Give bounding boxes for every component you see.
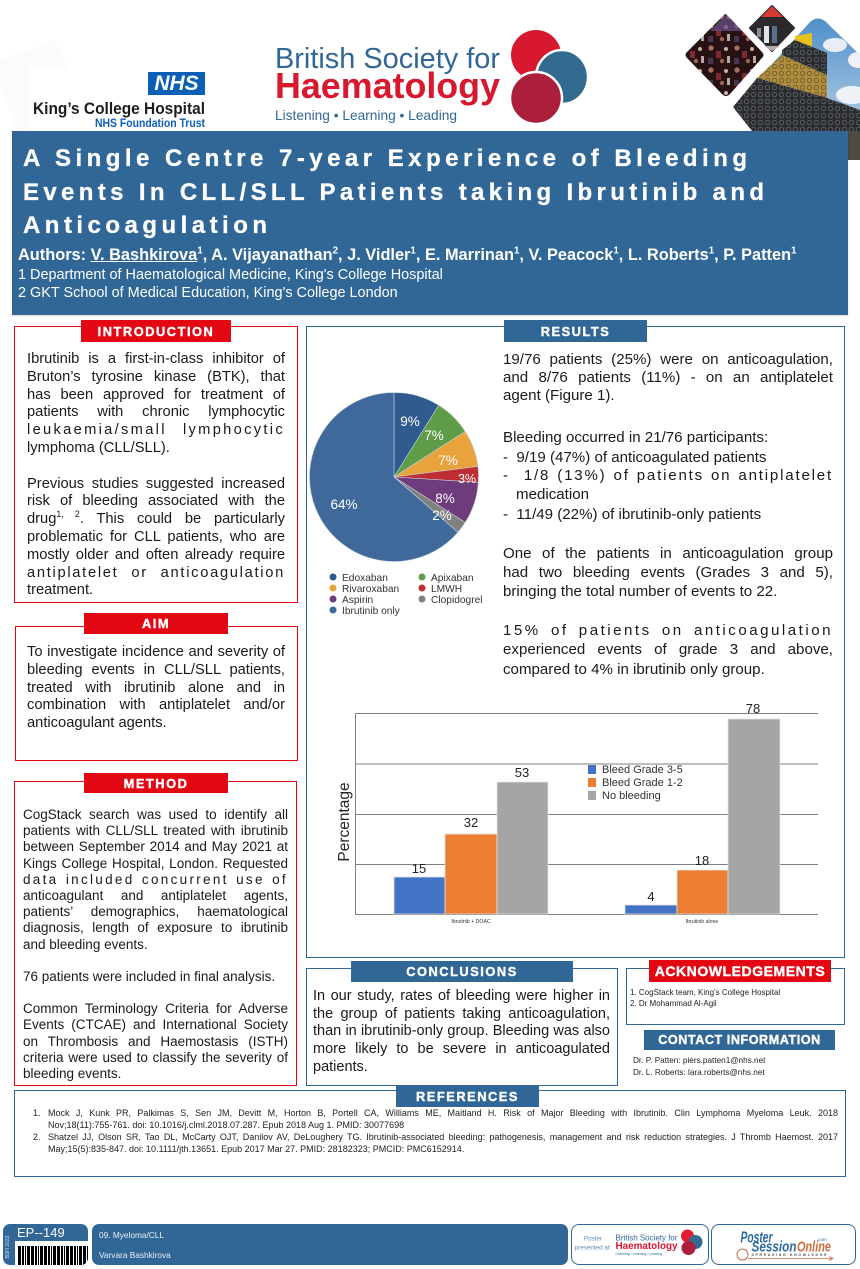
text: results: bringing the total number of events to 22.	[503, 583, 777, 600]
text: aim: bleeding events in CLL/SLL patients,	[27, 662, 285, 678]
logo: British Society for Haematology	[275, 30, 587, 123]
text: introduction: treatment.	[27, 582, 93, 598]
footer: BSH logo box	[571, 1224, 709, 1265]
chart legend: No bleeding	[602, 790, 661, 802]
title: A Single Centre 7-year Experience of Bleeding	[23, 145, 747, 172]
heading: results: RESULTS	[541, 324, 610, 339]
pie legend: Apixaban	[431, 573, 473, 584]
pie legend: Clopidogrel	[431, 595, 483, 606]
slice: Apixaban 7%	[394, 405, 465, 477]
text: introduction: Previous studies suggested increased	[27, 476, 285, 492]
chart legend: Bleed Grade 3-5	[602, 764, 683, 776]
heading: introduction: INTRODUCTION	[98, 324, 214, 339]
heading: acknowledgements: ACKNOWLEDGEMENTS	[655, 963, 825, 979]
heading: references: REFERENCES	[416, 1089, 519, 1104]
category labels: Ibrutinib alone	[686, 919, 718, 925]
text: conclusions: patients.	[313, 1059, 368, 1075]
footer: Poster Session Online logo box: .com	[817, 1237, 827, 1242]
footer: Poster Session Online logo box: Online	[797, 1238, 831, 1256]
bar value labels: 78	[746, 701, 760, 716]
panel: introduction	[14, 326, 298, 603]
text: references: 2.	[33, 1132, 41, 1142]
text: results: - 1/8 (13%) of patients on antiplatelet	[503, 467, 833, 484]
affiliations: 2 GKT School of Medical Education, King's College London	[18, 285, 398, 301]
text: method	[23, 807, 288, 1081]
pie value labels: 7%	[438, 453, 458, 468]
pie legend: Edoxaban	[342, 573, 388, 584]
text: introduction: antiplatelet or anticoagulation	[27, 565, 285, 581]
poster number: EP--149	[17, 1225, 65, 1240]
heading: conclusions: CONCLUSIONS	[406, 964, 518, 979]
hospital name: King’s College Hospital	[33, 100, 205, 118]
logo: King's College Hospital NHS	[29, 68, 208, 132]
heading: contact information: CONTACT INFORMATION	[658, 1033, 821, 1047]
text: introduction: Bruton’s tyrosine kinase (BTK), that	[27, 369, 285, 385]
pie legend: Aspirin	[342, 595, 373, 606]
bars: Ibrutinib alone	[625, 719, 780, 914]
pie value labels: 3%	[458, 472, 476, 486]
footer: BSH logo box: Listening • Learning • Leading	[616, 1252, 662, 1256]
vertical code: BSH 2023	[5, 1236, 11, 1258]
text: aim: treated with ibrutinib alone and in	[27, 680, 285, 696]
heading: results	[504, 320, 647, 342]
text: method: data included concurrent use of	[23, 872, 288, 887]
heading: method	[84, 773, 228, 793]
text: method: Kings College Hospital, London. Requested	[23, 856, 288, 871]
hospital name	[33, 100, 205, 130]
slice: Ibrutinib only 64%	[310, 392, 458, 562]
text: aim: To investigate incidence and severity of	[27, 644, 285, 660]
hospital name: NHS Foundation Trust	[95, 118, 205, 130]
heading: references	[396, 1085, 539, 1107]
text: results: One of the patients in anticoagulation group	[503, 545, 833, 562]
affiliations	[18, 267, 443, 301]
text: results: 19/76 patients (25%) were on anticoagulation,	[503, 351, 833, 368]
text: method: patients’ demographics, haematological	[23, 904, 288, 919]
text: references: Shatzel JJ, Olson SR, Tao DL, McCarty OJT, Danilov AV, DeLoughery TG. Ibrutinib-associated bleeding: pathogenesis, management and risk reduction strategies. J Thromb Haemost. 2017	[48, 1132, 838, 1142]
text: results: had two bleeding events (Grades 3 and 5),	[503, 564, 833, 581]
text: results: - 11/49 (22%) of ibrutinib-only patients	[503, 506, 761, 523]
text: introduction: lymphoma (CLL/SLL).	[27, 440, 170, 456]
heading: method: METHOD	[124, 776, 188, 791]
axis title: Percentage	[336, 782, 353, 862]
heading: contact information	[644, 1030, 835, 1050]
bars: Ibrutinib + DOAC	[394, 782, 548, 914]
text: conclusions: the group of patients taking anticoagulation,	[313, 1006, 610, 1022]
title	[23, 145, 764, 239]
text: method: CogStack search was used to identify all	[23, 807, 288, 822]
text: method: anticoagulant and antiplatelet agents,	[23, 888, 288, 903]
bar value labels: 32	[464, 815, 478, 830]
text: method: Events (CTCAE) and International Society	[23, 1017, 288, 1032]
pie value labels: 7%	[424, 428, 444, 443]
footer: Poster Session Online logo box: Poster	[740, 1230, 773, 1246]
heading: aim	[84, 613, 228, 634]
text: method: and bleeding events.	[23, 936, 148, 952]
bar value labels	[412, 701, 760, 904]
pie value labels: 9%	[400, 414, 420, 429]
text: method: diagnosis, length of exposure to ibrutinib	[23, 920, 288, 935]
photo collage: diamonds	[686, 5, 860, 160]
footer: BSH logo box: Poster	[584, 1236, 602, 1242]
pie chart: anticoagulant distribution	[309, 392, 483, 617]
footer: Poster Session Online logo box	[711, 1224, 856, 1265]
pie legend	[330, 573, 483, 617]
panel: acknowledgements	[626, 968, 845, 1025]
text: introduction: drug1, 2. This could be particularly	[27, 509, 285, 527]
title banner	[12, 131, 848, 315]
text: references: 1.	[33, 1108, 41, 1118]
pie value labels: 64%	[330, 497, 358, 512]
text: conclusions: In our study, rates of bleeding were higher in	[313, 988, 610, 1004]
footer: BSH logo box: presented at:	[575, 1244, 612, 1252]
author: Varvara Bashkirova	[99, 1250, 171, 1260]
text: references	[33, 1108, 838, 1154]
category: 09. Myeloma/CLL	[99, 1230, 164, 1240]
text: references: Nov;18(11):755-761. doi: 10.1016/j.clml.2018.07.287. Epub 2018 Aug 1. PMID: 30077698	[48, 1120, 404, 1130]
text: results: medication	[516, 486, 589, 503]
pie value labels: 8%	[435, 491, 455, 506]
slice: LMWH 3%	[394, 466, 479, 482]
bar value labels: 15	[412, 861, 426, 876]
heading: introduction	[81, 320, 231, 342]
text: introduction: patients with chronic lymphocytic	[27, 404, 285, 420]
authors: Authors: V. Bashkirova1, A. Vijayanathan2, J. Vidler1, E. Marrinan1, V. Peacock1, L. Roberts1, P. Patten1	[18, 246, 796, 264]
footer: Poster Session Online logo box: Session	[752, 1238, 796, 1256]
barcode	[15, 1241, 88, 1265]
text: method: on Thrombosis and Haemostasis (ISTH)	[23, 1034, 288, 1049]
text: references: Mock J, Kunk PR, Palkimas S, Sen JM, Devitt M, Horton B, Portell CA, Williams ME, Maitland H. Risk of Major Bleeding with Ibrutinib. Clin Lymphoma Myeloma Leuk. 2018	[48, 1108, 838, 1118]
background decoration: faint hexagon	[0, 40, 110, 132]
category labels	[451, 919, 718, 925]
text: results: Bleeding occurred in 21/76 participants:	[503, 429, 768, 446]
heading: conclusions	[351, 961, 573, 982]
footer: BSH logo box: British Society for	[616, 1232, 678, 1242]
affiliations: 1 Department of Haematological Medicine, King's College Hospital	[18, 267, 443, 283]
pie legend: Rivaroxaban	[342, 584, 399, 595]
text: references: May;15(5):835-847. doi: 10.1111/jth.13651. Epub 2017 Mar 27. PMID: 28182323; PMCID: PMC6152914.	[48, 1144, 464, 1154]
text: method: between September 2014 and May 2021 at	[23, 839, 288, 854]
heading: acknowledgements	[649, 960, 831, 982]
chart legend: Bleed Grade 1-2	[602, 777, 683, 789]
text: acknowledgements: 2. Dr Mohammad Al-Agil	[630, 999, 717, 1008]
logo: British Society for Haematology: British Society for	[275, 43, 500, 75]
text: aim	[27, 644, 285, 731]
panel: method	[14, 781, 297, 1086]
NHS badge: NHS	[154, 72, 199, 95]
text: method: Common Terminology Criteria for Adverse	[23, 1001, 288, 1016]
text: contact information	[633, 1056, 766, 1077]
text: contact information: Dr. L. Roberts: lara.roberts@nhs.net	[633, 1068, 765, 1077]
footer: Poster Session Online logo box: SPREADING KNOWLEDGE	[752, 1253, 827, 1257]
logo: British Society for Haematology: Haematology	[275, 65, 500, 106]
text: results: - 9/19 (47%) of anticoagulated patients	[503, 449, 766, 466]
panel: conclusions	[306, 968, 618, 1086]
title: Anticoagulation	[23, 212, 267, 239]
text: results: and 8/76 patients (11%) - on an antiplatelet	[503, 369, 833, 386]
footer: category and author bar	[92, 1224, 568, 1265]
text: results: 15% of patients on anticoagulation	[503, 622, 833, 639]
text: introduction	[27, 351, 285, 598]
bar value labels: 53	[515, 765, 529, 780]
slice: Rivaroxaban 7%	[394, 432, 478, 477]
panel: references	[14, 1090, 846, 1177]
text: introduction: leukaemia/small lymphocytic	[27, 422, 285, 438]
text: acknowledgements: 1. CogStack team, King’s College Hospital	[630, 988, 780, 997]
text: results	[503, 351, 833, 678]
text: acknowledgements	[630, 988, 780, 1008]
chart legend	[588, 764, 683, 802]
text: method: criteria were used to classify the severity of	[23, 1050, 288, 1065]
text: results: experienced events of grade 3 and above,	[503, 641, 833, 658]
text: conclusions: than in ibrutinib-only group. Bleeding was also	[313, 1023, 610, 1039]
panel: results	[306, 326, 845, 958]
pie legend: Ibrutinib only	[342, 606, 401, 617]
text: introduction: mostly older and often already require	[27, 547, 285, 563]
slice: Clopidogrel 2%	[394, 477, 465, 532]
bar value labels: 18	[695, 853, 709, 868]
text: conclusions: more likely to be severe in anticoagulated	[313, 1041, 610, 1057]
bar chart: bleeding grade by group	[336, 701, 818, 925]
pie value labels: 2%	[432, 508, 452, 523]
text: introduction: has been approved for treatment of	[27, 387, 285, 403]
text: introduction: risk of bleeding associated with the	[27, 493, 285, 509]
panel: aim	[15, 626, 298, 761]
pie legend: LMWH	[431, 584, 462, 595]
text: conclusions	[313, 988, 610, 1075]
footer: BSH logo box: Haematology	[616, 1241, 678, 1252]
text: method: patients with CLL/SLL treated with ibrutinib	[23, 823, 288, 838]
logo: British Society for Haematology: Listening • Learning • Leading	[275, 107, 457, 123]
slice: Edoxaban 9%	[394, 392, 439, 477]
text: method: 76 patients were included in final analysis.	[23, 969, 275, 984]
bar value labels: 4	[647, 889, 655, 904]
title: Events In CLL/SLL Patients taking Ibrutinib and	[23, 179, 764, 206]
pie value labels	[330, 414, 476, 523]
category labels: Ibrutinib + DOAC	[451, 919, 491, 925]
footer: poster ID block	[3, 1224, 88, 1265]
heading: aim: AIM	[142, 616, 170, 631]
text: introduction: Ibrutinib is a first-in-class inhibitor of	[27, 351, 285, 367]
text: results: compared to 4% in ibrutinib only group.	[503, 661, 765, 678]
text: results: agent (Figure 1).	[503, 387, 615, 404]
text: aim: anticoagulant agents.	[27, 715, 167, 731]
slice: Aspirin 8%	[394, 477, 478, 522]
text: aim: combination with antiplatelet and/or	[27, 697, 285, 713]
text: method: bleeding events.	[23, 1066, 121, 1081]
text: introduction: problematic for CLL patients, who are	[27, 529, 285, 545]
text: contact information: Dr. P. Patten: piers.patten1@nhs.net	[633, 1056, 765, 1065]
